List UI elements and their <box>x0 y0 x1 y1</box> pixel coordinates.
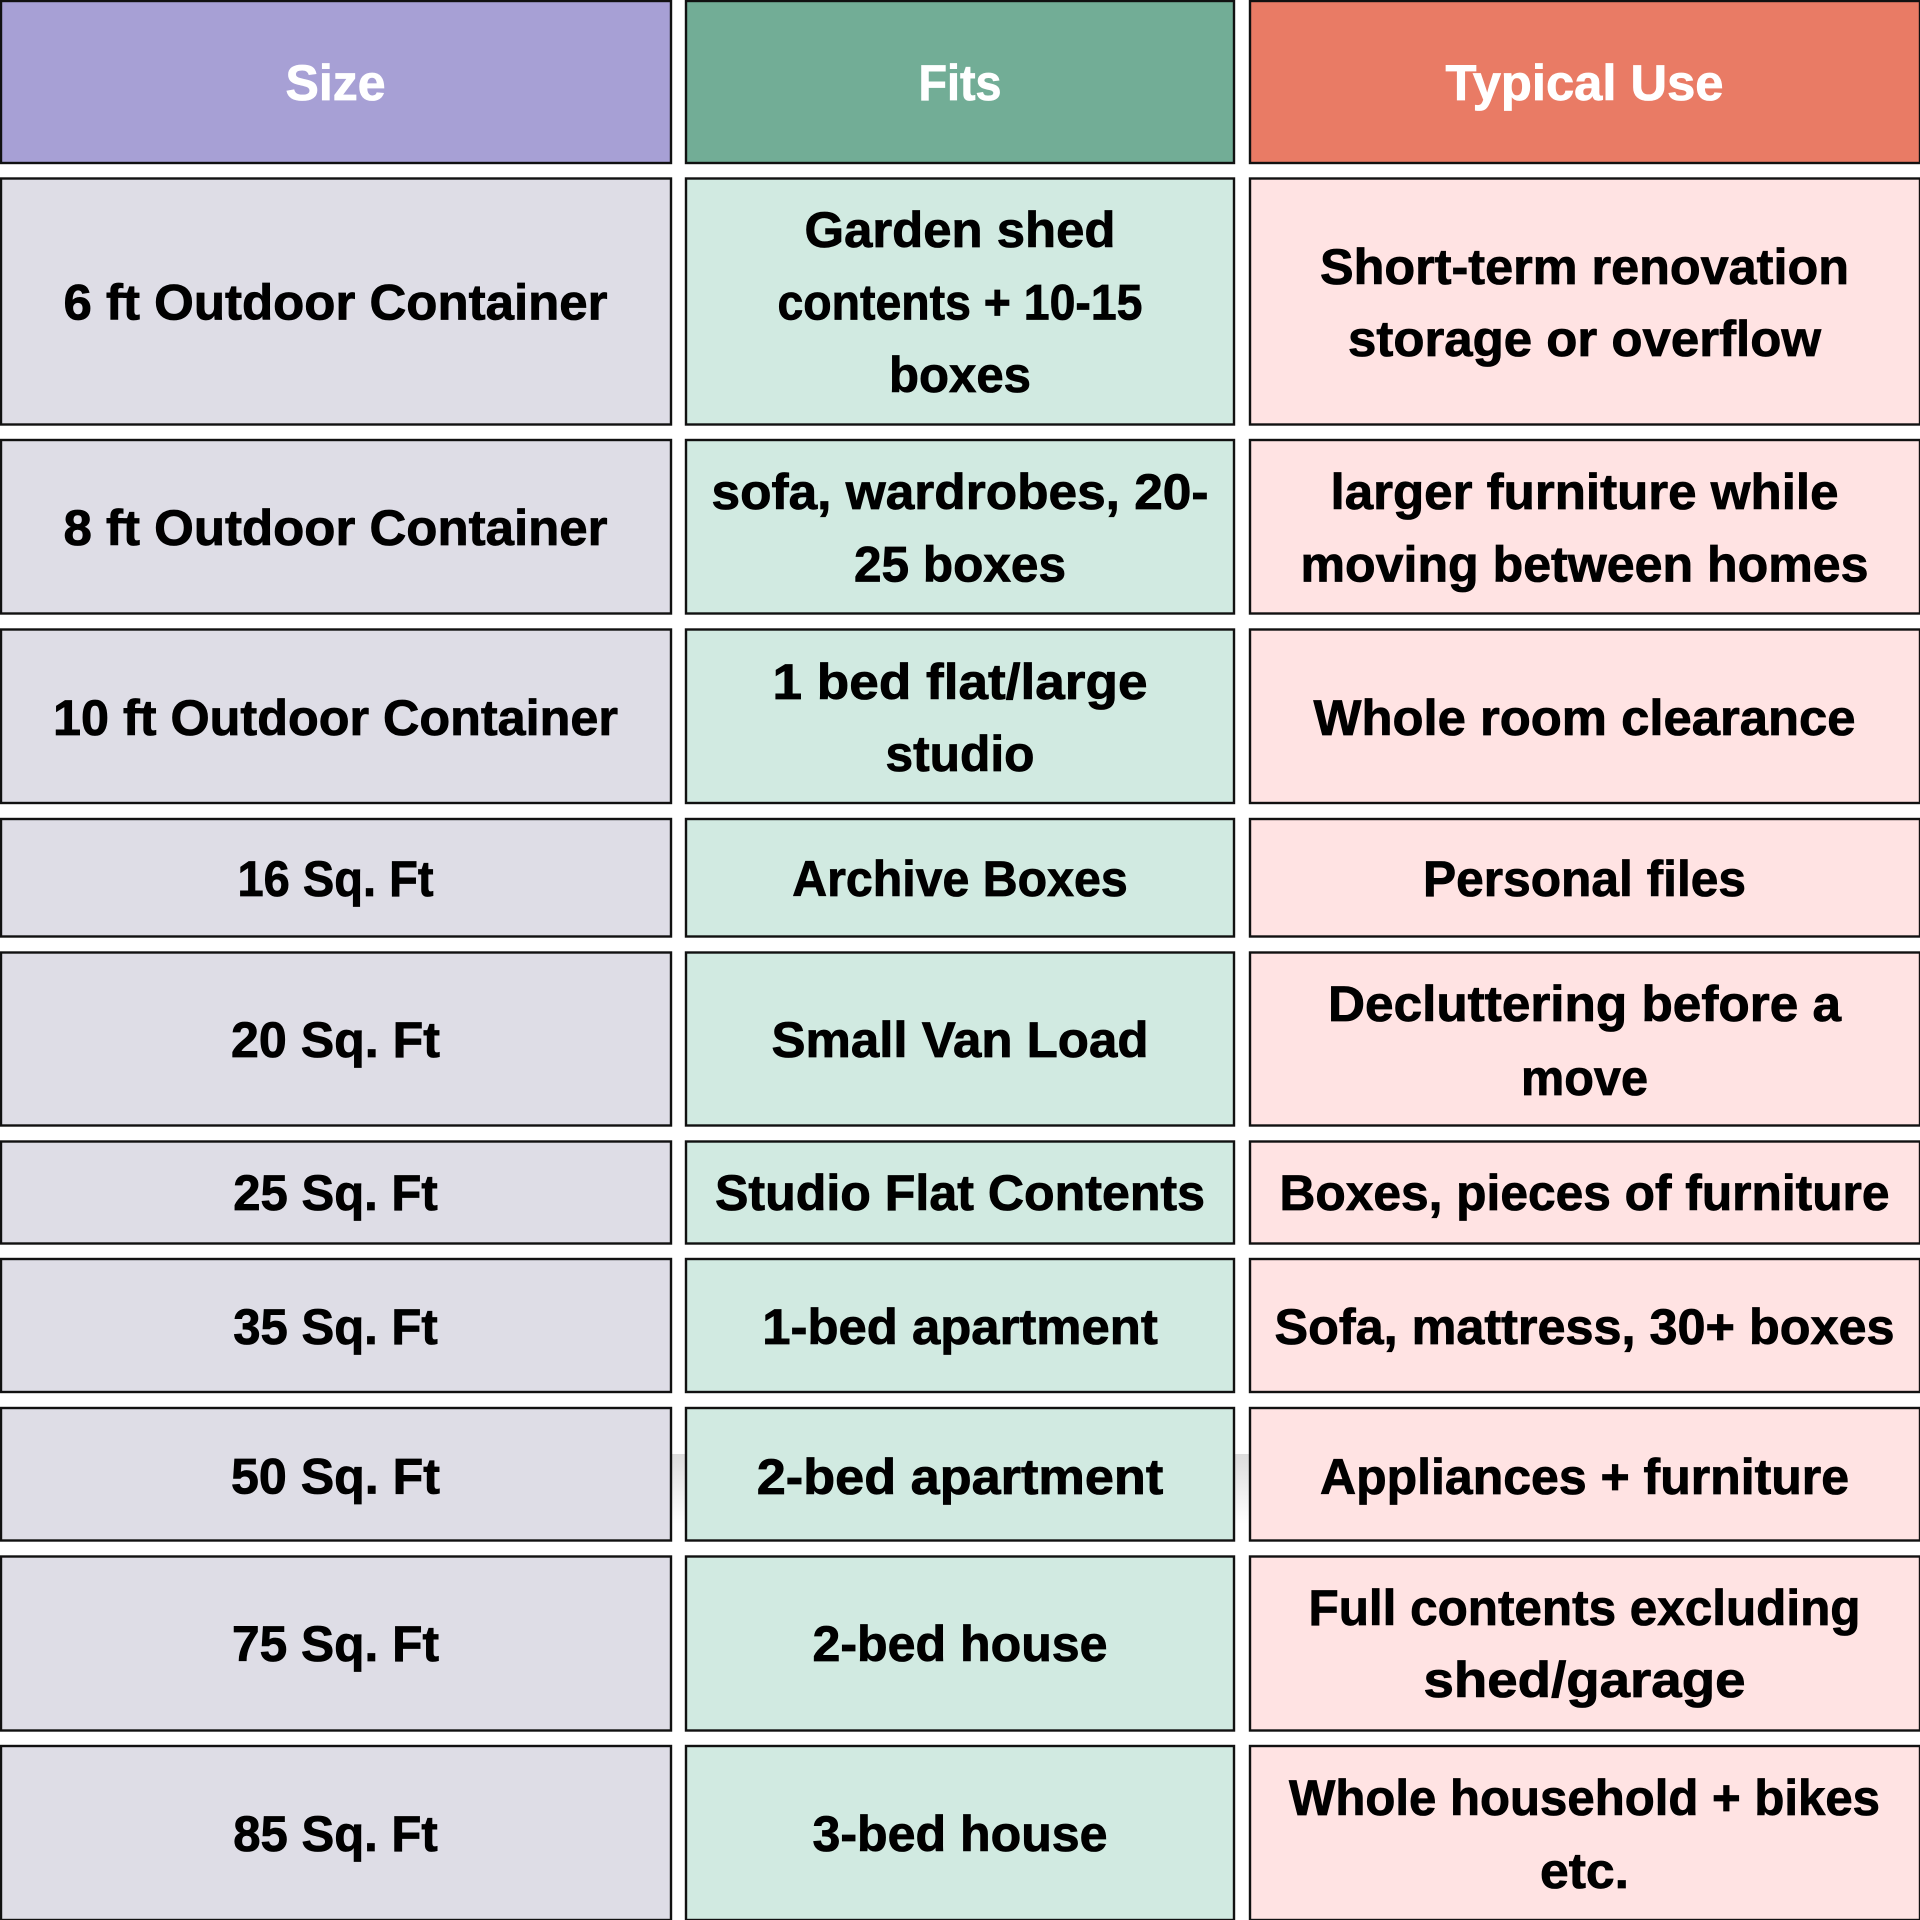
row 5 size: 20 Sq. Ft <box>231 1012 440 1068</box>
row 10 use: etc. <box>1540 1843 1629 1899</box>
row 9 size <box>1 1556 671 1730</box>
row 4 use <box>1250 819 1920 936</box>
row 6 use <box>1250 1142 1920 1244</box>
row 2 fits: 25 boxes <box>854 536 1066 592</box>
row 3 fits: 1 bed flat/large <box>772 654 1148 710</box>
row 5 size <box>1 952 671 1126</box>
row 10 fits: 3-bed house <box>812 1806 1108 1862</box>
row 6 fits: Studio Flat Contents <box>715 1165 1205 1221</box>
row 4 size: 16 Sq. Ft <box>238 851 434 907</box>
row 8 size: 50 Sq. Ft <box>231 1448 440 1504</box>
header: Size <box>1 1 671 163</box>
row 1 fits: contents + 10-15 <box>778 274 1142 330</box>
row 8 fits: 2-bed apartment <box>757 1449 1164 1505</box>
row 2 fits <box>686 440 1234 614</box>
row 3 fits: studio <box>886 726 1034 782</box>
row 8 use <box>1250 1408 1920 1540</box>
row 9 fits: 2-bed house <box>812 1616 1108 1672</box>
row 10 size <box>1 1746 671 1920</box>
row 1 fits: boxes <box>889 347 1031 403</box>
row 2 size <box>1 440 671 614</box>
row 2 size: 8 ft Outdoor Container <box>64 500 608 556</box>
row 1 use: Short-term renovation <box>1320 239 1849 295</box>
row 2 use: larger furniture while <box>1330 464 1838 520</box>
row 2 use: moving between homes <box>1300 536 1868 592</box>
row 4 fits: Archive Boxes <box>792 851 1128 907</box>
row 9 size: 75 Sq. Ft <box>232 1616 439 1672</box>
row 9 use: Full contents excluding <box>1308 1580 1860 1636</box>
row 3 size <box>1 630 671 803</box>
row 1 use <box>1250 178 1920 424</box>
row 3 size: 10 ft Outdoor Container <box>53 690 618 746</box>
row 9 fits <box>686 1556 1234 1730</box>
header: Fits <box>686 1 1234 163</box>
row 4 size <box>1 819 671 936</box>
header: Typical Use <box>1250 1 1920 163</box>
row 7 use: Sofa, mattress, 30+ boxes <box>1274 1299 1894 1355</box>
row 1 fits <box>686 178 1234 424</box>
row 1 use: storage or overflow <box>1348 311 1821 367</box>
row 5 use: Decluttering before a <box>1328 976 1842 1032</box>
row 7 size <box>1 1259 671 1392</box>
row 8 fits <box>686 1408 1234 1540</box>
header: Fits: Fits <box>918 55 1002 111</box>
row 5 fits: Small Van Load <box>772 1012 1148 1068</box>
row 3 use: Whole room clearance <box>1314 690 1856 746</box>
row 1 size: 6 ft Outdoor Container <box>64 274 608 330</box>
row 8 size <box>1 1408 671 1540</box>
row 6 size <box>1 1142 671 1244</box>
row 3 use <box>1250 630 1920 803</box>
row 10 size: 85 Sq. Ft <box>233 1806 438 1862</box>
row 10 use <box>1250 1746 1920 1920</box>
header: Size: Size <box>286 55 386 111</box>
row 9 use <box>1250 1556 1920 1730</box>
row 5 fits <box>686 952 1234 1126</box>
row 4 use: Personal files <box>1423 851 1746 907</box>
row 10 fits <box>686 1746 1234 1920</box>
row 7 fits <box>686 1259 1234 1392</box>
row 10 use: Whole household + bikes <box>1289 1770 1880 1826</box>
row 6 size: 25 Sq. Ft <box>233 1165 438 1221</box>
row 6 fits <box>686 1142 1234 1244</box>
row 1 size <box>1 178 671 424</box>
row 2 use <box>1250 440 1920 614</box>
row 7 size: 35 Sq. Ft <box>233 1299 438 1355</box>
row 1 fits: Garden shed <box>804 202 1116 258</box>
header: Typical Use: Typical Use <box>1446 55 1724 111</box>
row 5 use: move <box>1521 1050 1648 1106</box>
row 6 use: Boxes, pieces of furniture <box>1280 1165 1890 1221</box>
row 7 fits: 1-bed apartment <box>762 1299 1158 1355</box>
row 5 use <box>1250 952 1920 1126</box>
row 2 fits: sofa, wardrobes, 20- <box>712 464 1208 520</box>
row 4 fits <box>686 819 1234 936</box>
row 7 use <box>1250 1259 1920 1392</box>
row 8 use: Appliances + furniture <box>1320 1449 1849 1505</box>
row 3 fits <box>686 630 1234 803</box>
row 9 use: shed/garage <box>1424 1652 1746 1708</box>
